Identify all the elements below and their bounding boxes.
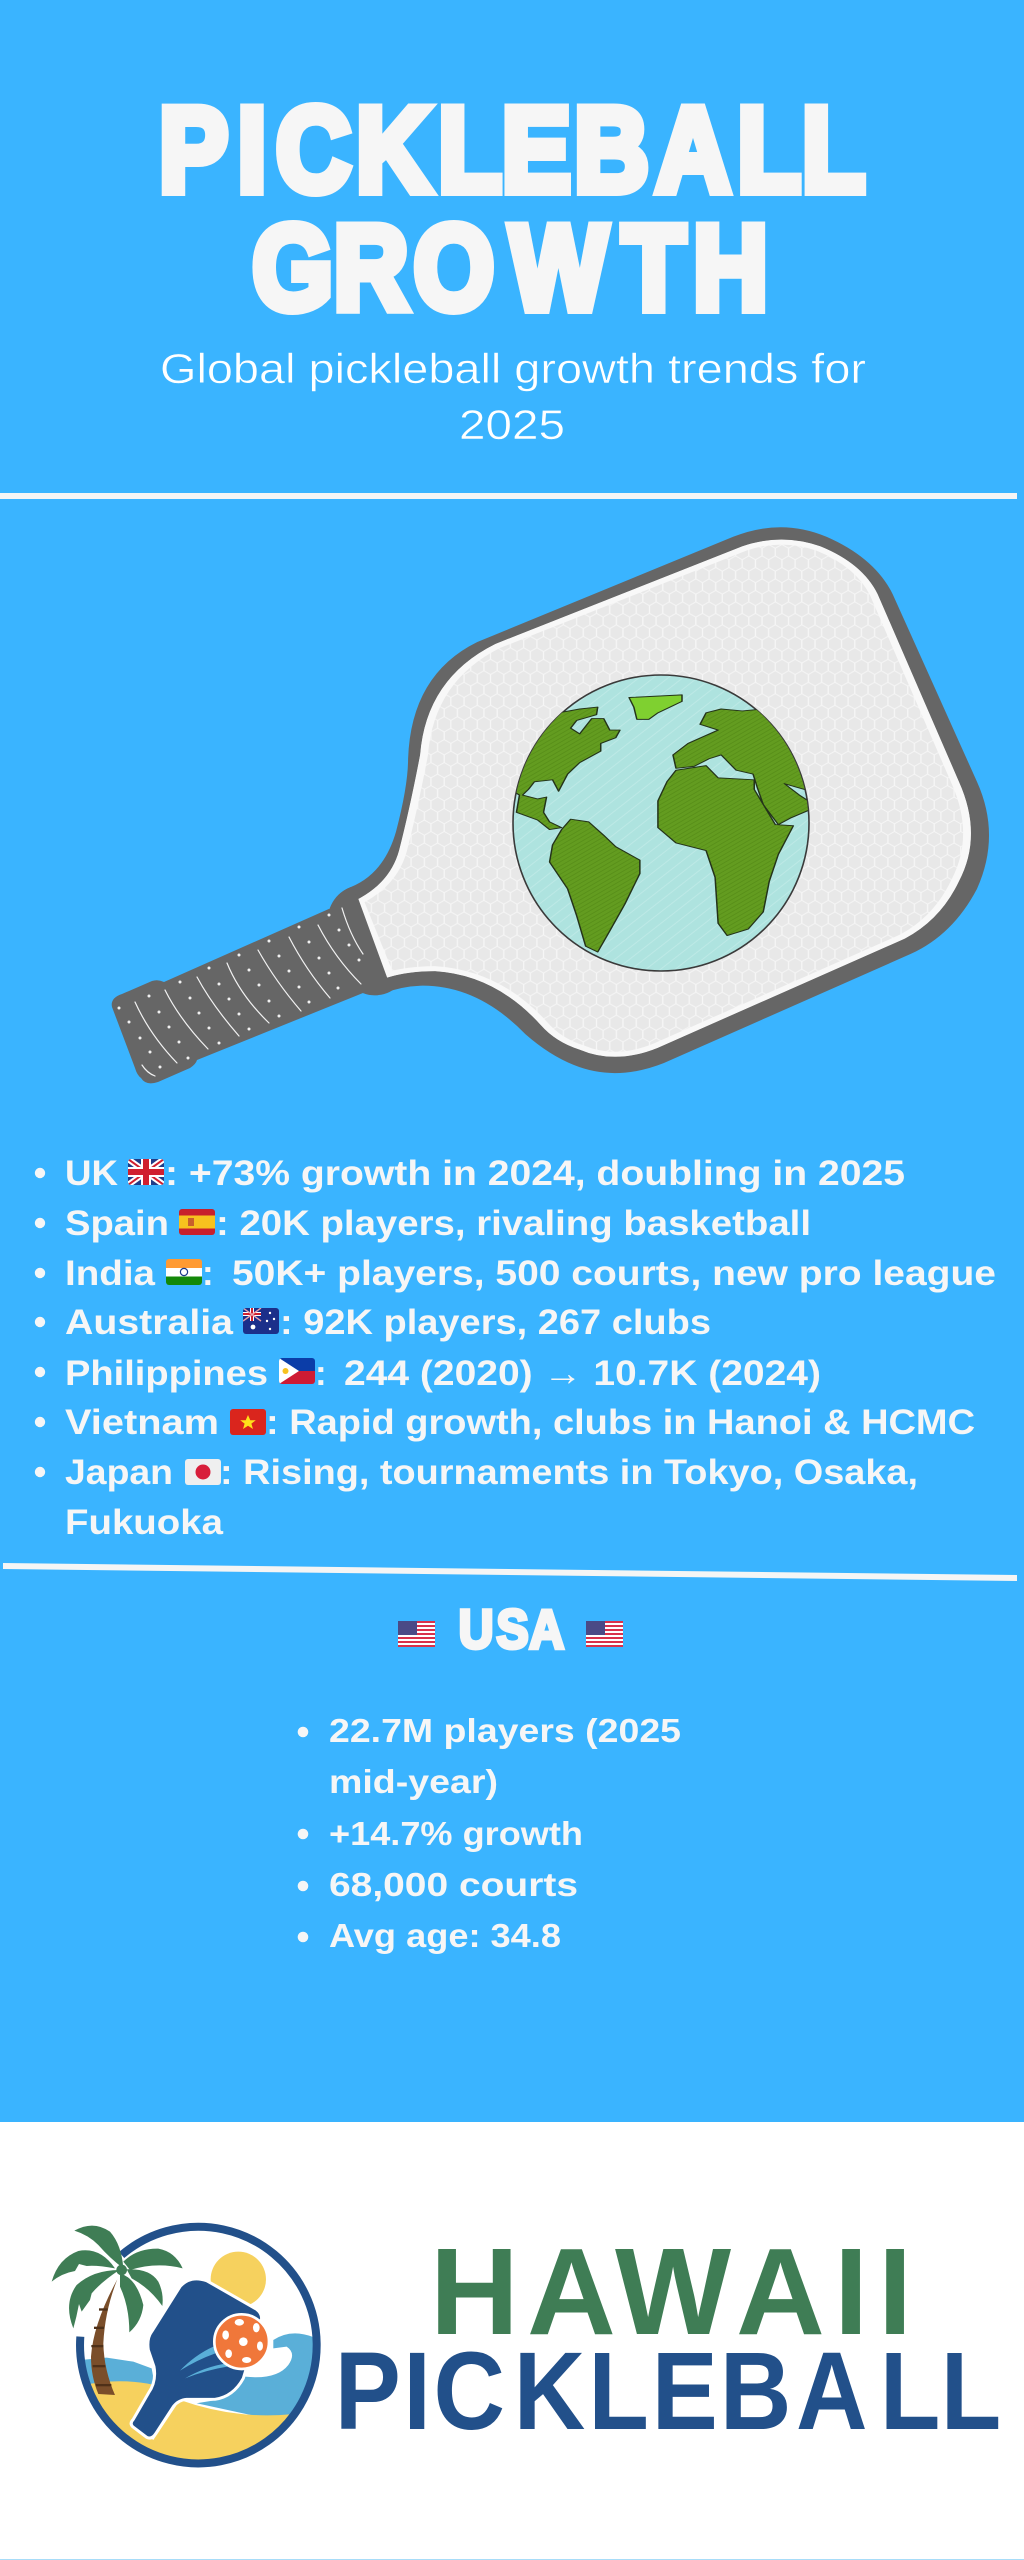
- row: Vietnam: : Rapid growth, clubs in Hanoi & HCMC: [266, 1403, 975, 1442]
- list: USA stats: Avg age: 34.8: [329, 1917, 561, 1954]
- row: Vietnam: [34, 1408, 974, 1442]
- row: Japan: Japan: [65, 1453, 173, 1492]
- footer bottom edge: [0, 2559, 1024, 2560]
- row: UK: : +73% growth in 2024, doubling in 2025: [165, 1154, 905, 1193]
- subtitle: [160, 345, 866, 448]
- row: Philippines: [34, 1358, 820, 1392]
- paddle handle: [112, 887, 393, 1083]
- title: PICKLEBALL: [159, 83, 865, 217]
- continent: eurasia: [673, 709, 817, 825]
- row: Philippines: :: [315, 1354, 327, 1393]
- row: Vietnam: Vietnam: [65, 1403, 219, 1442]
- row: Philippines: Philippines: [65, 1354, 268, 1393]
- row: India: India: [65, 1254, 156, 1293]
- heading: USA: USA: [459, 1598, 564, 1660]
- row: Japan: : Rising, tournaments in Tokyo, Osaka,: [220, 1453, 918, 1492]
- logo: Hawaii Pickleball: [52, 2224, 1001, 2467]
- title: [159, 83, 865, 335]
- list: USA stats: mid-year): [329, 1763, 498, 1800]
- row: India: [34, 1259, 995, 1292]
- row: Spain: [34, 1209, 808, 1242]
- continent: north america: [510, 707, 620, 830]
- logo emblem: [52, 2226, 320, 2467]
- list: USA stats: [298, 1712, 681, 1954]
- continent: africa: [658, 766, 793, 936]
- list: USA stats: 22.7M players (2025: [329, 1712, 681, 1749]
- row: Philippines: 244 (2020) → 10.7K (2024): [344, 1354, 821, 1393]
- title: GROWTH: [252, 201, 768, 335]
- row: Spain: : 20K players, rivaling basketball: [216, 1204, 811, 1243]
- logo wordmark: PICKLEBALL: PICKLEBALL: [335, 2330, 1001, 2453]
- row: Spain: Spain: [65, 1204, 169, 1243]
- continent: south america: [550, 819, 640, 952]
- icon: globe: [510, 675, 817, 971]
- icon: US flag right: [586, 1621, 623, 1647]
- heading: USA: [398, 1598, 623, 1660]
- row: Japan: [34, 1458, 916, 1534]
- row: Australia: : 92K players, 267 clubs: [280, 1303, 711, 1342]
- row: UK: [34, 1159, 904, 1192]
- row: India: :: [202, 1254, 214, 1293]
- white footer panel: [0, 2122, 1024, 2560]
- row: India: 50K+ players, 500 courts, new pro league: [232, 1254, 996, 1293]
- row: Australia: Australia: [65, 1303, 234, 1342]
- paddle body: [330, 527, 989, 1073]
- illustration: pickleball paddle with globe: [112, 527, 989, 1083]
- continent: greenland: [629, 695, 682, 719]
- subtitle: 2025: [459, 401, 565, 448]
- row: UK: UK: [65, 1154, 118, 1193]
- list: USA stats: +14.7% growth: [329, 1815, 583, 1852]
- row: Japan: Fukuoka: [65, 1503, 224, 1542]
- icon: US flag left: [398, 1621, 435, 1647]
- list: international growth: [35, 1154, 996, 1542]
- subtitle: Global pickleball growth trends for: [160, 345, 866, 392]
- logo wordmark: HAWAII: HAWAII: [430, 2224, 912, 2361]
- row: Australia: [34, 1308, 710, 1342]
- list: USA stats: 68,000 courts: [329, 1866, 578, 1903]
